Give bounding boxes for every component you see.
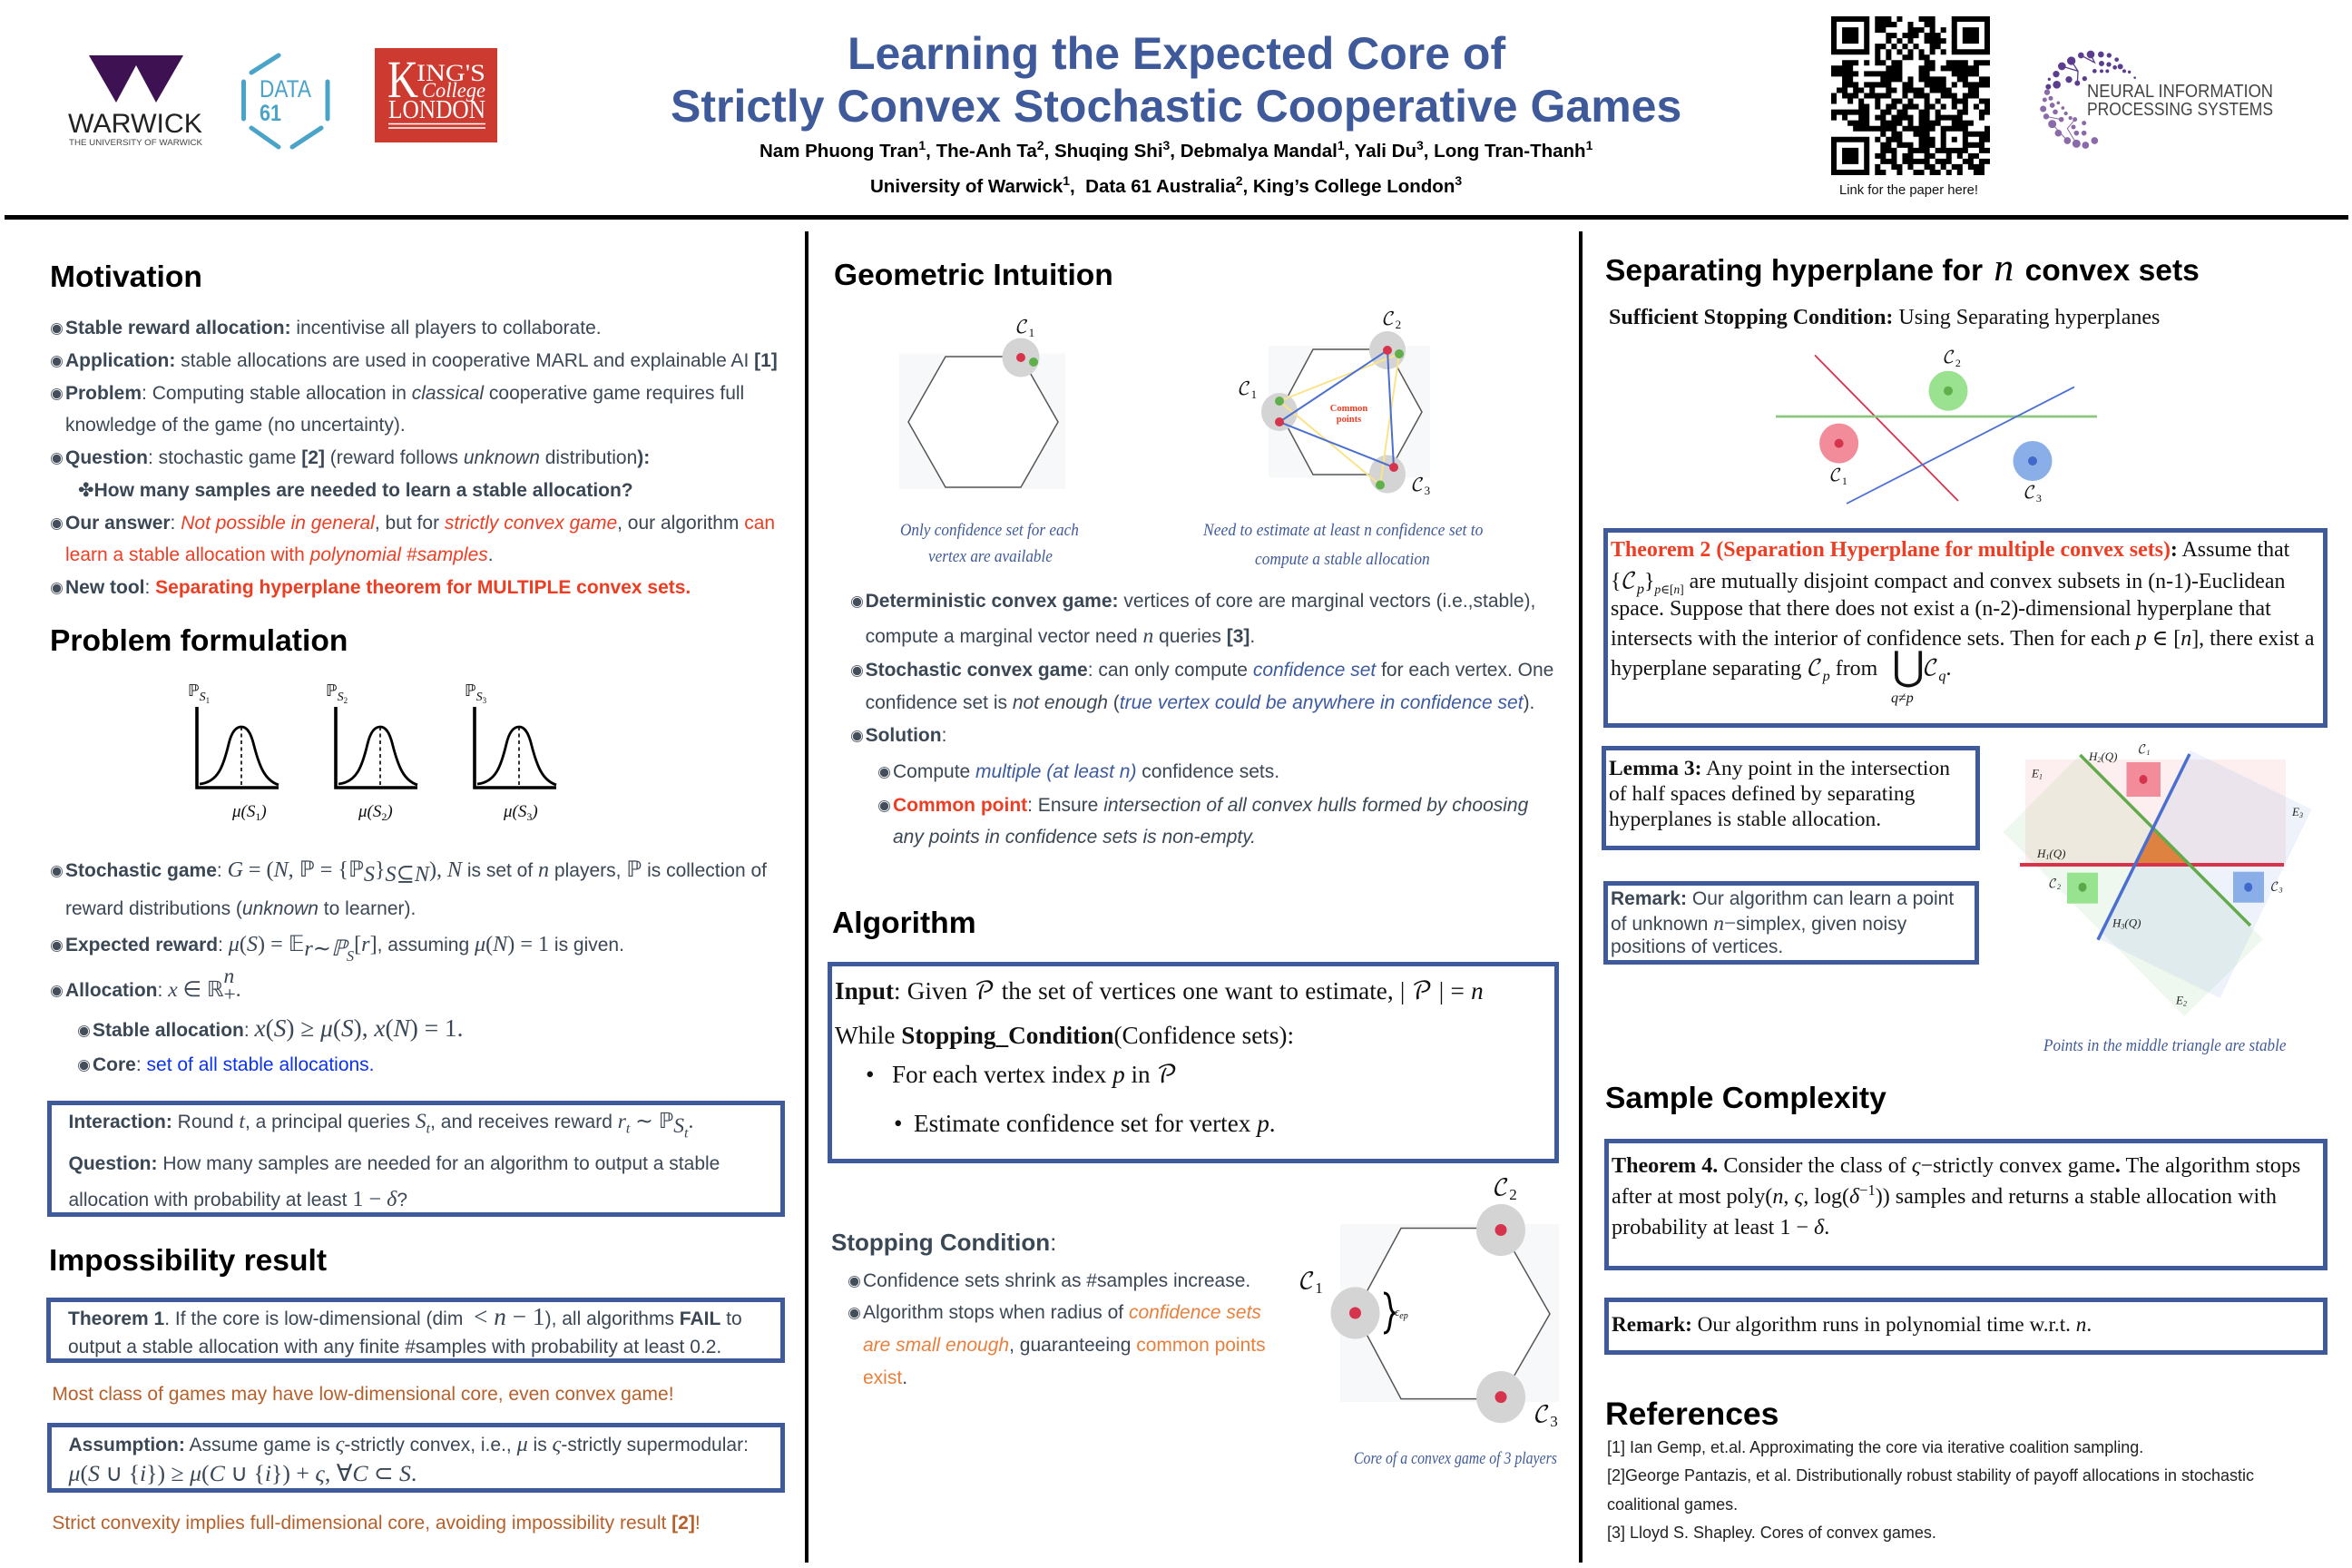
- panel: right column: [1592, 250, 2341, 1556]
- diagram: core of a convex game: 𝒞: [1534, 1405, 1550, 1427]
- authors and affiliations: Nam Phuong Tran1, The-Anh Ta2, Shuqing Shi3, Debmalya Mandal1, Yali Du3, Long Tran-Thanh1: [760, 138, 1592, 162]
- callout: theorem 2: 𝒞q.: [1923, 657, 1952, 684]
- heading: Motivation: Motivation: [50, 260, 202, 294]
- subheading: Stopping Condition: Stopping Condition:: [831, 1229, 1056, 1256]
- callout: theorem 2: space. Suppose that there does not exist a (n-2)-dimensional hyperplane that: [1611, 597, 2271, 621]
- diagram: multiple confidence sets and common points: [1238, 310, 1430, 497]
- logo: Neural Information Processing Systems: NEURAL INFORMATION: [2087, 82, 2273, 102]
- diagram: half spaces and stable triangle: E: [2292, 805, 2299, 818]
- callout: polynomial time remark: Remark: Our algorithm runs in polynomial time w.r.t. n.: [1612, 1313, 2092, 1337]
- diagram: separating hyperplanes: 𝒞: [2024, 485, 2036, 502]
- heading: References: References: [1605, 1396, 1779, 1432]
- logo: Neural Information Processing Systems: PROCESSING SYSTEMS: [2087, 100, 2273, 120]
- logo: King's College London: [375, 48, 497, 142]
- diagram: single confidence set on hexagon: 𝒞: [1015, 319, 1029, 338]
- curve 2: μ(S: [358, 802, 381, 821]
- caption: core of a convex game of 3 players: Core of a convex game of 3 players: [1354, 1450, 1557, 1468]
- callout: remark on simplex: Remark: Our algorithm can learn a point: [1611, 888, 1954, 909]
- text block: problem definitions: [51, 858, 767, 1075]
- curve 1: 1: [255, 810, 260, 823]
- panel: middle column: [828, 259, 1559, 1468]
- subheading: sufficient stopping condition: Sufficient Stopping Condition: Using Separating hyperplanes: [1609, 306, 2160, 329]
- text block: references: [1605, 1438, 2259, 1543]
- diagram: core of a convex game: 𝒞: [1493, 1178, 1509, 1200]
- diagram: multiple confidence sets and common points: 𝒞: [1382, 311, 1396, 329]
- callout: assumption: [47, 1423, 785, 1493]
- caption: only confidence set: [900, 522, 1079, 566]
- callout: algorithm pseudocode: While Stopping_Condition(Confidence sets):: [835, 1022, 1294, 1049]
- diagram: single confidence set on hexagon: 1: [1029, 326, 1034, 339]
- caption: link for the paper: Link for the paper here!: [1839, 183, 1978, 198]
- diagram: half spaces and stable triangle: H: [2037, 847, 2045, 860]
- logo: University of Warwick: WARWICK: [68, 109, 202, 139]
- header band: [68, 16, 2273, 198]
- sub-bullet: compute multiple: Compute multiple (at least n) confidence sets.: [893, 761, 1279, 782]
- bullet: problem: Problem: Computing stable allocation in classical cooperative game requires full: [65, 383, 744, 404]
- bullet: stochastic convex game: Stochastic convex game: can only compute confidence set for each vertex. One: [866, 660, 1553, 681]
- text block: geometric intuition bullets: [851, 591, 1553, 848]
- logo: Data 61: 61: [260, 101, 281, 126]
- chart: three reward distributions: [188, 681, 557, 823]
- heading: Impossibility result: Impossibility result: [49, 1244, 327, 1278]
- curve 2: ℙ: [326, 681, 338, 700]
- bullet: algorithm stops: Algorithm stops when radius of confidence sets: [863, 1302, 1261, 1323]
- text block: references: [1] Ian Gemp, et.al. Approximating the core via iterative coalition sampling.: [1607, 1438, 2143, 1456]
- callout: theorem 2: {𝒞p}p∈[n] are mutually disjoint compact and convex subsets in (n-1)-Euclidean: [1611, 570, 2285, 597]
- curve 1: ): [260, 802, 267, 821]
- authors and affiliations: [760, 138, 1592, 197]
- logo: King's College London: College: [422, 79, 485, 102]
- QR code with caption: [1831, 16, 1990, 198]
- caption: at least n confidence sets: compute a stable allocation: [1255, 551, 1429, 569]
- callout: theorem 4: Theorem 4. Consider the class of ς−strictly convex game. The algorithm stops: [1612, 1154, 2300, 1178]
- heading: Separating hyperplane: Separating hyperplane for n convex sets: [1605, 246, 2200, 289]
- callout: theorem 1: Theorem 1. If the core is low-dimensional (dim < n − 1), all algorithms FAIL to: [68, 1303, 742, 1330]
- diagram: core of a convex game: 3: [1550, 1413, 1558, 1430]
- sub-bullet: how many samples: ✤How many samples are needed to learn a stable allocation?: [78, 479, 633, 501]
- diagram: half spaces and stable triangle: 𝒞: [2049, 878, 2057, 890]
- diagram: core of a convex game: 1: [1315, 1279, 1323, 1297]
- bullet: confidence sets shrink: Confidence sets shrink as #samples increase.: [863, 1270, 1250, 1291]
- callout: algorithm pseudocode: For each vertex index p in 𝒫: [892, 1061, 1177, 1088]
- curve 1: S: [200, 691, 206, 704]
- callout: interaction and question: Question: How many samples are needed for an algorithm to output a stable: [69, 1153, 720, 1174]
- callout: interaction and question: [47, 1100, 785, 1216]
- diagram: half spaces and stable triangle: 3: [2278, 887, 2282, 895]
- diagram: half spaces and stable triangle: 2: [2097, 756, 2101, 764]
- diagram: core of a convex game: [1293, 1175, 1561, 1429]
- note: low-dimensional core: Most class of games may have low-dimensional core, even convex game!: [52, 1384, 674, 1405]
- diagram: half spaces and stable triangle: E: [2032, 767, 2039, 780]
- diagram: half spaces and stable triangle: 2: [2183, 1000, 2187, 1008]
- callout: algorithm pseudocode: •: [894, 1110, 903, 1137]
- callout: algorithm pseudocode: [828, 962, 1559, 1163]
- callout: remark on simplex: [1603, 881, 1979, 965]
- title: Strictly Convex Stochastic Cooperative Games: [671, 80, 1681, 131]
- diagram: core of a convex game: 𝒞: [1298, 1271, 1315, 1294]
- callout: theorem 1: [46, 1298, 785, 1363]
- callout: theorem 2: intersects with the interior of confidence sets. Then for each p ∈ [n], there exist a: [1611, 627, 2315, 651]
- diagram: half spaces and stable triangle: (Q): [2101, 750, 2117, 763]
- callout: theorem 1: output a stable allocation with any finite #samples with probability at least 0.2.: [68, 1337, 721, 1357]
- caption: at least n confidence sets: [1203, 522, 1483, 569]
- callout: theorem 2: Theorem 2 (Separation Hyperplane for multiple convex sets): Assume that: [1611, 538, 2289, 562]
- logo: University of Warwick: [68, 55, 203, 148]
- curve 3: 3: [526, 810, 532, 823]
- diagram: half spaces and stable triangle: 3: [2120, 923, 2124, 931]
- curve 2: [326, 681, 417, 823]
- curve 1: μ(S: [232, 802, 255, 821]
- curve 1: ℙ: [188, 681, 200, 700]
- callout: lemma 3: Lemma 3: Any point in the intersection: [1609, 757, 1950, 780]
- callout: theorem 2: [1603, 528, 2328, 728]
- diagram: half spaces and stable triangle: E: [2176, 994, 2183, 1007]
- logo: King's College London: LONDON: [388, 96, 485, 124]
- callout: algorithm pseudocode: Input: Given 𝒫 the set of vertices one want to estimate, | 𝒫 | = n: [835, 977, 1484, 1004]
- callout: theorem 2: hyperplane separating 𝒞p from: [1611, 657, 1877, 684]
- curve 3: ): [531, 802, 538, 821]
- curve 3: 3: [483, 696, 487, 705]
- text block: motivation bullets: learn a stable allocation with polynomial #samples.: [65, 544, 494, 565]
- callout: assumption: μ(S ∪ {i}) ≥ μ(C ∪ {i}) + ς, ∀C ⊂ S.: [69, 1460, 416, 1486]
- diagram: separating hyperplanes: [1769, 345, 2105, 508]
- curve 2: S: [338, 691, 344, 704]
- bullet: question: Question: stochastic game [2] (reward follows unknown distribution):: [65, 447, 650, 468]
- note: strict convexity: Strict convexity implies full-dimensional core, avoiding impossibility result [2]!: [52, 1513, 701, 1534]
- diagram: separating hyperplanes: 2: [1955, 357, 1961, 369]
- logo: Data 61: [241, 53, 330, 149]
- bullet: solution: Solution:: [866, 725, 946, 746]
- callout: theorem 2: ⋃: [1892, 643, 1925, 690]
- diagram: half spaces and stable triangle: (Q): [2124, 916, 2141, 930]
- callout: remark on simplex: positions of vertices.: [1611, 936, 1783, 957]
- heading: Sample Complexity: Sample Complexity: [1605, 1082, 1886, 1115]
- sub-bullet: common point: Common point: Ensure intersection of all convex hulls formed by choosing: [893, 795, 1528, 816]
- title: Learning the Expected Core of: [848, 27, 1505, 78]
- diagram: core of a convex game: ep: [1399, 1311, 1408, 1321]
- text block: motivation bullets: [51, 318, 778, 598]
- diagram: half spaces and stable triangle: H: [2112, 916, 2121, 930]
- diagram: half spaces and stable triangle: 1: [2146, 749, 2150, 757]
- diagram: multiple confidence sets and common points: points: [1337, 415, 1361, 425]
- sub-bullet: stable allocation: Stable allocation: x(S) ≥ μ(S), x(N) = 1.: [93, 1014, 463, 1042]
- callout: theorem 4: probability at least 1 − δ.: [1612, 1216, 1829, 1240]
- callout: algorithm pseudocode: Estimate confidence set for vertex p.: [914, 1110, 1276, 1137]
- diagram: multiple confidence sets and common points: 𝒞: [1238, 381, 1251, 399]
- bullet: new tool: New tool: Separating hyperplane theorem for MULTIPLE convex sets.: [65, 577, 691, 598]
- text block: geometric intuition bullets: any points in confidence sets is non-empty.: [893, 827, 1256, 848]
- diagram: half spaces and stable triangle: (Q): [2049, 847, 2065, 860]
- curve 3: μ(S: [504, 802, 526, 821]
- text block: stopping condition bullets: [844, 1269, 1270, 1391]
- caption: at least n confidence sets: Need to estimate at least n confidence set to: [1203, 522, 1483, 540]
- bullet: our answer: Our answer: Not possible in general, but for strictly convex game, our algorithm can: [65, 513, 775, 534]
- text block: references: [3] Lloyd S. Shapley. Cores of convex games.: [1607, 1524, 1936, 1542]
- text block: references: coalitional games.: [1607, 1495, 1738, 1514]
- callout: algorithm pseudocode: •: [866, 1061, 875, 1088]
- logo: Neural Information Processing Systems: [2040, 51, 2273, 149]
- logo: King's College London: ING'S: [416, 60, 485, 86]
- diagram: half spaces and stable triangle: 3: [2298, 811, 2303, 819]
- text block: problem definitions: reward distributions (unknown to learner).: [65, 898, 416, 919]
- heading: Geometric Intuition: Geometric Intuition: [834, 259, 1113, 292]
- title: [671, 27, 1681, 131]
- logo: King's College London: K: [387, 50, 418, 109]
- text block: references: [2]George Pantazis, et al. Distributionally robust stability of payoff allocations in stochastic: [1607, 1466, 2254, 1485]
- diagram: multiple confidence sets and common points: 2: [1396, 318, 1401, 331]
- diagram: half spaces and stable triangle: 1: [2039, 773, 2043, 781]
- curve 2: 2: [344, 696, 348, 705]
- diagram: core of a convex game: 2: [1509, 1186, 1517, 1203]
- text block: geometric intuition bullets: confidence set is not enough (true vertex could be anywhere in confidence set).: [866, 692, 1534, 713]
- logo: University of Warwick: THE UNIVERSITY OF WARWICK: [69, 138, 203, 148]
- callout: polynomial time remark: [1604, 1298, 2328, 1355]
- bullet: stochastic game: Stochastic game: G = (N, ℙ = {ℙS}S⊆N), N is set of n players, ℙ is collection of: [65, 858, 767, 887]
- callout: lemma 3: hyperplanes is stable allocation.: [1609, 808, 1881, 831]
- callout: interaction and question: Interaction: Round t, a principal queries St, and receives reward rt ∼ ℙSt.: [69, 1110, 693, 1142]
- diagram: half spaces and stable triangle: H: [2089, 750, 2097, 763]
- diagram: core of a convex game: ϵ: [1395, 1305, 1399, 1318]
- curve 1: 1: [206, 696, 210, 705]
- text block: geometric intuition bullets: compute a marginal vector need n queries [3].: [866, 624, 1255, 648]
- bullet: deterministic convex game: Deterministic convex game: vertices of core are marginal vectors (i.e.,stable),: [866, 591, 1535, 612]
- bullet: expected reward: Expected reward: μ(S) = 𝔼r∼ℙS[r], assuming μ(N) = 1 is given.: [65, 932, 624, 965]
- bullet: allocation: Allocation: x ∈ ℝn+.: [65, 965, 241, 1006]
- callout: theorem 4: [1604, 1139, 2328, 1270]
- callout: theorem 4: after at most poly(n, ς, log(δ−1)) samples and returns a stable allocation with: [1612, 1181, 2277, 1209]
- diagram: half spaces and stable triangle: 2: [2057, 883, 2061, 891]
- text block: motivation bullets: knowledge of the game (no uncertainty).: [65, 415, 406, 436]
- bullet: stable reward allocation: Stable reward allocation: incentivise all players to collaborate.: [65, 318, 602, 338]
- callout: interaction and question: allocation with probability at least 1 − δ?: [69, 1187, 407, 1211]
- bullet: application: Application: stable allocations are used in cooperative MARL and explainable AI [1]: [65, 350, 778, 371]
- curve 2: 2: [381, 810, 387, 823]
- panel: left column: [46, 260, 785, 1534]
- diagram: multiple confidence sets and common points: 3: [1425, 484, 1430, 497]
- diagram: half spaces and stable triangle: 𝒞: [2138, 744, 2146, 756]
- curve 3: ℙ: [465, 681, 476, 700]
- diagram: separating hyperplanes: 𝒞: [1829, 467, 1842, 485]
- diagram: separating hyperplanes: 1: [1842, 475, 1847, 487]
- callout: assumption: Assumption: Assume game is ς-strictly convex, i.e., μ is ς-strictly supermodular:: [69, 1432, 749, 1456]
- diagram: half spaces and stable triangle: [2001, 744, 2314, 1018]
- text block: stopping condition bullets: are small enough, guaranteeing common points: [863, 1335, 1266, 1356]
- diagram: half spaces and stable triangle: 1: [2045, 853, 2049, 861]
- callout: remark on simplex: of unknown n−simplex, given noisy: [1611, 912, 1906, 936]
- diagram: multiple confidence sets and common points: Common: [1330, 404, 1367, 414]
- sub-bullet: core: Core: set of all stable allocations.: [93, 1054, 375, 1075]
- text block: stopping condition bullets: exist.: [863, 1367, 907, 1388]
- heading: Algorithm: Algorithm: [832, 906, 976, 940]
- logo: Data 61: DATA: [260, 75, 311, 103]
- caption: only confidence set: Only confidence set for each: [900, 522, 1079, 540]
- caption: middle triangle: Points in the middle triangle are stable: [2043, 1037, 2286, 1055]
- diagram: multiple confidence sets and common points: 𝒞: [1411, 477, 1425, 495]
- diagram: separating hyperplanes: 3: [2036, 492, 2042, 505]
- diagram: single confidence set on hexagon: [907, 319, 1059, 488]
- curve 2: ): [386, 802, 393, 821]
- curve 1: [188, 681, 279, 823]
- caption: only confidence set: vertex are available: [927, 548, 1052, 566]
- diagram: separating hyperplanes: 𝒞: [1943, 349, 1955, 367]
- callout: lemma 3: [1602, 746, 1980, 850]
- heading: Problem formulation: Problem formulation: [50, 624, 348, 658]
- curve 3: [465, 681, 556, 823]
- diagram: half spaces and stable triangle: 𝒞: [2270, 882, 2278, 894]
- callout: theorem 2: q≠p: [1891, 691, 1914, 706]
- authors and affiliations: University of Warwick1, Data 61 Australia2, King’s College London3: [870, 173, 1462, 197]
- diagram: multiple confidence sets and common points: 1: [1251, 387, 1257, 401]
- callout: lemma 3: of half spaces defined by separating: [1609, 782, 1915, 806]
- curve 3: S: [476, 691, 483, 704]
